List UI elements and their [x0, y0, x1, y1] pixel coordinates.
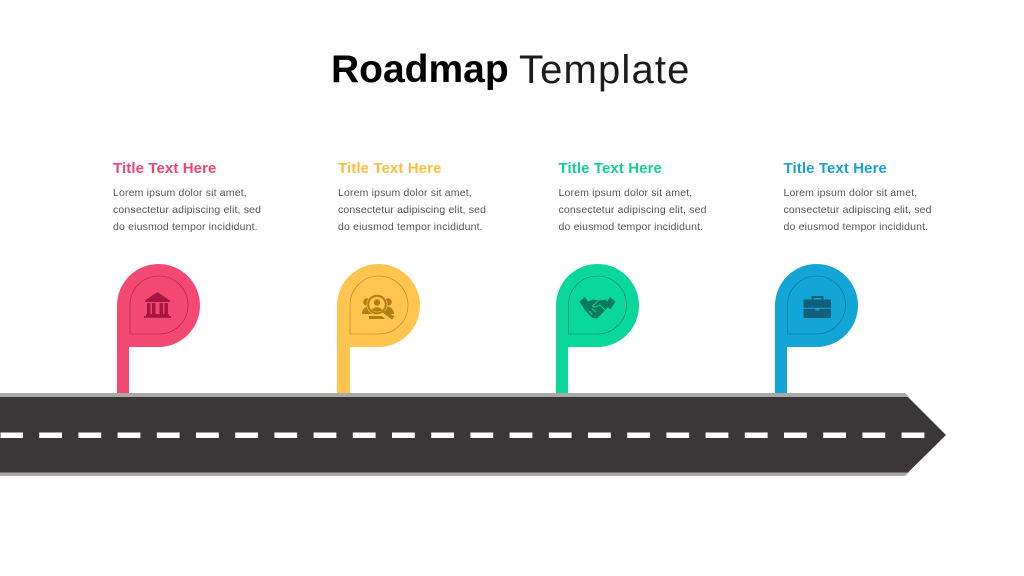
text block: step 2: consectetur adipiscing elit, sed	[338, 204, 486, 216]
text block: step 1: Lorem ipsum dolor sit amet,	[113, 186, 247, 198]
icon: people search	[362, 294, 394, 320]
text block: step 2: do eiusmod tempor incididunt.	[338, 221, 483, 233]
text block: step 4	[784, 160, 932, 233]
text block: step 2: Lorem ipsum dolor sit amet,	[338, 186, 472, 198]
text block: step 1	[113, 160, 261, 233]
text block: step 4: do eiusmod tempor incididunt.	[784, 221, 928, 233]
text block: step 4: consectetur adipiscing elit, sed	[784, 204, 932, 216]
text block: step 3: do eiusmod tempor incididunt.	[558, 221, 703, 233]
text block: step 3: consectetur adipiscing elit, sed	[558, 204, 707, 216]
text block: step 2: Title Text Here	[338, 160, 441, 176]
title: Roadmap	[331, 48, 509, 91]
title	[331, 48, 691, 92]
text block: step 4: Title Text Here	[784, 160, 887, 176]
icon: briefcase	[804, 296, 831, 318]
pin: step 3 with handshake icon	[556, 264, 639, 394]
text block: step 1: consectetur adipiscing elit, sed	[113, 204, 261, 216]
icon: handshake	[580, 297, 616, 318]
text block: step 1: do eiusmod tempor incididunt.	[113, 221, 258, 233]
pin: step 4 with briefcase icon	[775, 264, 858, 394]
road arrow	[0, 393, 946, 476]
title: Template	[519, 48, 691, 92]
text block: step 3: Title Text Here	[558, 160, 662, 176]
text block: step 1: Title Text Here	[113, 160, 216, 176]
text block: step 3: Lorem ipsum dolor sit amet,	[558, 186, 692, 198]
text block: step 3	[558, 160, 707, 233]
lane dashes	[0, 432, 924, 438]
text block: step 2	[338, 160, 486, 233]
text block: step 4: Lorem ipsum dolor sit amet,	[784, 186, 917, 198]
pin: step 1 with bank icon	[117, 264, 200, 394]
icon: bank	[144, 292, 171, 318]
pin: step 2 with people search icon	[337, 264, 420, 394]
